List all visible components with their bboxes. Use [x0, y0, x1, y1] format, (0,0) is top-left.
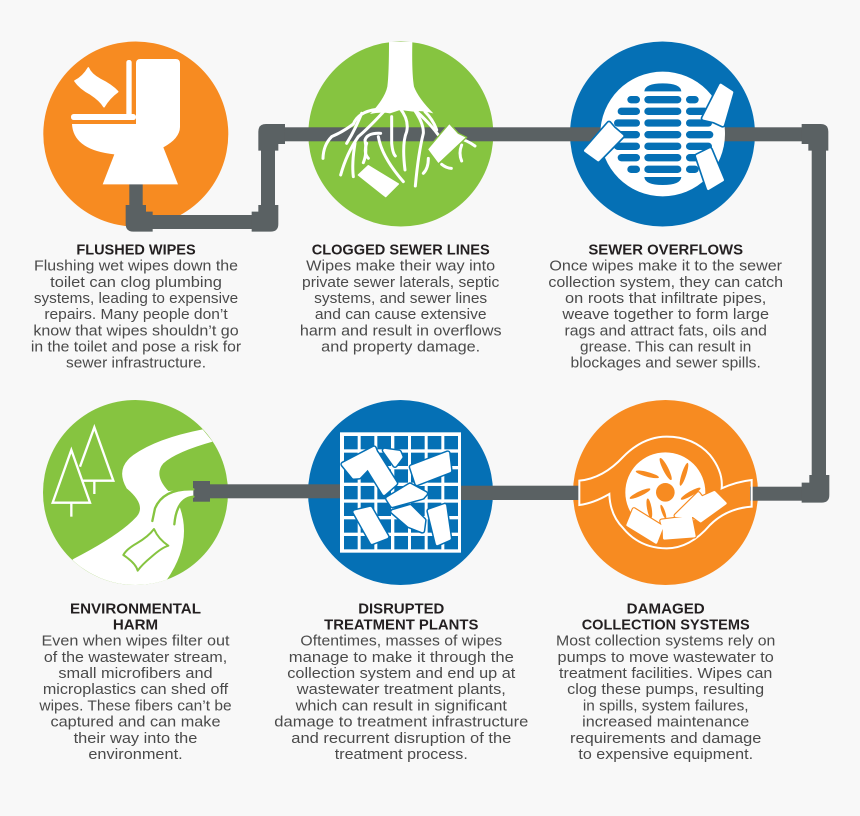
text: disrupted treatment plants [274, 601, 528, 763]
text: damaged collection systems: treatment facilities. Wipes can [559, 666, 772, 682]
text: flushed wipes: toilet can clog plumbing [50, 275, 222, 291]
text: disrupted treatment plants: damage to treatment infrastructure [274, 715, 528, 731]
text: damaged collection systems: clog these pumps, resulting [567, 682, 764, 698]
text: clogged sewer lines: and can cause extensive [315, 307, 487, 323]
text: flushed wipes: Flushing wet wipes down the [34, 259, 238, 275]
icon: sewer grate with wipes [585, 72, 732, 196]
icon: pump impeller clogged with wipes [579, 437, 752, 548]
icon: treatment plant screen clogged with wipes [340, 432, 461, 553]
text: clogged sewer lines [300, 242, 502, 356]
text: disrupted treatment plants: which can result in significant [295, 698, 507, 714]
text: environmental harm: HARM [113, 617, 158, 633]
text: flushed wipes: repairs. Many people don’t [44, 307, 228, 323]
text: damaged collection systems: COLLECTION SYSTEMS [582, 617, 750, 633]
text: environmental harm: of the wastewater stream, [44, 650, 227, 666]
text: damaged collection systems [556, 601, 775, 763]
text: disrupted treatment plants: collection system and end up at [287, 666, 515, 682]
text: environmental harm [38, 601, 232, 763]
text: disrupted treatment plants: DISRUPTED [358, 601, 444, 617]
text: environmental harm: Even when wipes filter out [42, 634, 229, 650]
circle: sewer overflows [570, 42, 755, 226]
icon: river with trees, outfall and wipe [51, 424, 212, 585]
text: environmental harm: ENVIRONMENTAL [70, 601, 201, 617]
circle: damaged collection systems [573, 400, 758, 585]
text: clogged sewer lines: Wipes make their way into [306, 259, 495, 275]
circle: environmental harm [43, 400, 228, 585]
text: damaged collection systems: increased maintenance [582, 715, 749, 731]
text: flushed wipes: in the toilet and pose a risk for [31, 340, 241, 356]
text: environmental harm: their way into the [74, 731, 197, 747]
circle: clogged sewer lines [308, 42, 493, 226]
text: environmental harm: wipes. These fibers can’t be [38, 698, 232, 714]
text: sewer overflows [548, 242, 783, 372]
text: sewer overflows: grease. This can result in [580, 340, 751, 356]
text: environmental harm: microplastics can shed off [43, 682, 229, 698]
text: clogged sewer lines: private sewer laterals, septic [302, 275, 499, 291]
pipe network connecting all steps [126, 124, 829, 503]
text: disrupted treatment plants: manage to make it through the [289, 650, 514, 666]
text: damaged collection systems: in spills, system failures, [583, 698, 749, 714]
text: disrupted treatment plants: Oftentimes, masses of wipes [300, 634, 502, 650]
text: environmental harm: environment. [88, 747, 183, 763]
circle: flushed wipes [43, 42, 228, 226]
text: disrupted treatment plants: TREATMENT PLANTS [324, 617, 479, 633]
text: damaged collection systems: Most collection systems rely on [556, 634, 775, 650]
text: environmental harm: captured and can make [50, 715, 220, 731]
text: flushed wipes: systems, leading to expensive [34, 291, 238, 307]
text: disrupted treatment plants: treatment process. [335, 747, 468, 763]
text: flushed wipes: FLUSHED WIPES [76, 242, 196, 258]
text: flushed wipes [31, 242, 241, 372]
text: damaged collection systems: pumps to move wastewater to [558, 650, 774, 666]
text: sewer overflows: collection system, they can catch [548, 275, 783, 291]
text: clogged sewer lines: CLOGGED SEWER LINES [312, 242, 490, 258]
text: environmental harm: small microfibers and [58, 666, 213, 682]
text: sewer overflows: blockages and sewer spills. [571, 356, 761, 372]
circle: disrupted treatment plants [308, 400, 493, 585]
text: clogged sewer lines: systems, and sewer lines [314, 291, 487, 307]
icon: tree roots with wipes [323, 42, 475, 197]
text: sewer overflows: SEWER OVERFLOWS [588, 242, 743, 258]
text: clogged sewer lines: harm and result in overflows [300, 323, 502, 339]
text: sewer overflows: rags and attract fats, oils and [565, 323, 767, 339]
text: damaged collection systems: requirements and damage [570, 731, 761, 747]
text: clogged sewer lines: and property damage. [321, 340, 480, 356]
icon: toilet with wipe [71, 59, 180, 184]
text: flushed wipes: sewer infrastructure. [66, 356, 206, 372]
text: damaged collection systems: DAMAGED [627, 601, 705, 617]
text: damaged collection systems: to expensive equipment. [578, 747, 753, 763]
text: sewer overflows: weave together to form large [561, 307, 769, 323]
text: sewer overflows: on roots that infiltrate pipes, [565, 291, 766, 307]
text: flushed wipes: know that wipes shouldn’t go [33, 323, 239, 339]
text: disrupted treatment plants: and recurrent disruption of the [291, 731, 511, 747]
text: disrupted treatment plants: wastewater treatment plants, [296, 682, 506, 698]
text: sewer overflows: Once wipes make it to the sewer [549, 259, 782, 275]
